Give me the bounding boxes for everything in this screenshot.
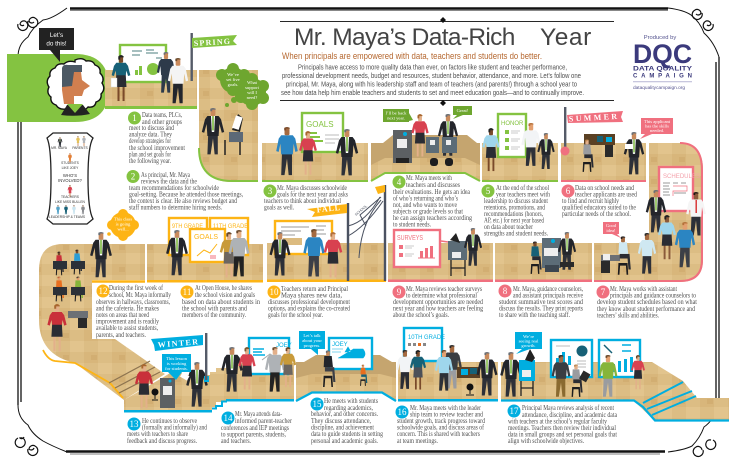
- step 17 text: attendance, discipline, and academic data: [522, 412, 617, 419]
- panel: who's involved: STUDENTS: [61, 161, 80, 165]
- step 15 text: regarding academics,: [324, 405, 373, 412]
- step 10 text: Teachers return and Principal: [281, 286, 348, 293]
- step 15 text: data to guide students in setting: [311, 431, 383, 438]
- panel: step 6 scene: [561, 132, 646, 182]
- panel: step 10 scene: [267, 221, 386, 282]
- step 5 text: year teachers meet with: [496, 192, 550, 198]
- step 16 text: student growth, track progress toward: [397, 418, 486, 425]
- step 12 text: [96, 284, 171, 339]
- step 2 text: [126, 170, 243, 212]
- step 10 text: discusses professional development: [268, 299, 350, 306]
- callout: great: Great!: [457, 108, 469, 113]
- thought bubbles: spring goals: support: [245, 85, 260, 90]
- step 12 text: and the cafeteria. He makes: [96, 306, 159, 312]
- cabinet: [160, 378, 175, 408]
- step 7 text: [596, 286, 697, 320]
- callout: let's talk: [299, 331, 325, 355]
- step 1 text: 1: [132, 113, 137, 123]
- step 15 text: They discuss attendance,: [311, 418, 371, 425]
- step 16 text: Mr. Maya meets with the leader: [410, 405, 482, 412]
- podium: [448, 233, 467, 276]
- panel: step 12 scene: [39, 232, 165, 400]
- step 15 text: behavior, and other concerns.: [311, 411, 378, 418]
- step 1 text: the following year.: [129, 158, 171, 165]
- step 6 text: teacher applicants are used: [575, 192, 638, 198]
- step 5 text: At the end of the school: [496, 185, 549, 192]
- step 14 text: Mr. Maya attends data-: [235, 411, 283, 418]
- callout: applicant: [640, 118, 673, 139]
- callout: let's talk: about your: [302, 338, 322, 343]
- callout: let's talk: Let’s talk: [303, 333, 321, 338]
- iron gate with flag poles: [348, 185, 385, 281]
- step 5 text: retentions, promotions, and: [484, 204, 545, 212]
- step 5 text: [482, 184, 550, 238]
- step 8 text: [498, 284, 584, 319]
- step 4 text: subjects or grade levels so that: [393, 208, 463, 216]
- step 5 text: strengths and student needs.: [484, 230, 548, 238]
- step 4 text: he can assign teachers according: [393, 215, 473, 222]
- step 14 text: 14: [224, 413, 233, 423]
- step 2 text: reviews the data and the: [141, 178, 197, 186]
- step 1 text: develop strategies for: [129, 138, 172, 145]
- step 4 text: of who’s returning and who’s: [393, 196, 458, 202]
- step 4 text: Mr. Maya meets with: [406, 175, 452, 182]
- iron gate with flag poles: SCHOOL: [354, 204, 368, 217]
- callout: let's do this: do this!: [46, 40, 67, 48]
- step 13 text: [127, 418, 207, 445]
- panel: step 8 scene: [495, 232, 592, 282]
- step 6 text: to find and recruit highly: [562, 198, 620, 205]
- step 4 text: their evaluations. He gets an idea: [393, 189, 470, 196]
- step 10 text: 10: [270, 287, 279, 297]
- step 6 text: particular needs of the school.: [562, 211, 631, 218]
- panel: step 17 scene: [500, 340, 729, 421]
- thought bubbles: spring goals: What: [247, 80, 258, 85]
- step 15 text: [310, 398, 383, 445]
- panel: spring step 1 scene: [105, 45, 197, 109]
- step 8 text: 8: [503, 286, 508, 296]
- callout: good idea: [603, 222, 621, 238]
- logo: Data Quality Campaign: Produced by: [644, 35, 676, 41]
- step 16 text: schoolwide goals, and discuss areas of: [397, 424, 485, 432]
- step 2 text: As principal, Mr. Maya: [141, 172, 190, 179]
- step 3 text: goals as well.: [264, 204, 294, 212]
- callout: applicant: This applicant: [644, 119, 671, 124]
- classroom desks: [426, 137, 457, 166]
- callout: let's do this: Let’s: [50, 32, 63, 39]
- podium with laptop: [225, 114, 243, 155]
- step 10 text: [268, 286, 351, 319]
- panel: who's involved: WHO’S: [63, 173, 77, 178]
- step 7 text: develop student schedules based on what: [597, 299, 697, 306]
- panel: who's involved: [47, 133, 93, 224]
- step 9 text: to determine what professional: [406, 292, 477, 300]
- panel: step 15 scene: [296, 338, 396, 401]
- grade and goals boards: 9TH GRADE: [172, 223, 204, 230]
- step 11 text: [180, 285, 261, 319]
- step 10 text: goals for the school year.: [268, 312, 323, 319]
- step 12 text: school, Mr. Maya informally: [109, 292, 171, 299]
- thought bubbles: spring goals: We’ve: [227, 72, 239, 77]
- thought bubble: class going well: This class: [114, 216, 132, 222]
- callout: real growth: growth.: [521, 343, 536, 348]
- panel: step 3 scene: [262, 113, 368, 182]
- subtitle: When principals are empowered with data, teachers and students do better.: [282, 50, 542, 61]
- step 6 text: Data on school needs and: [575, 185, 635, 192]
- step 11 text: the school with parents and: [182, 306, 248, 312]
- flag: winter: [151, 333, 207, 380]
- people: data team: [111, 52, 188, 103]
- flag: fall: [307, 185, 385, 217]
- panel: who's involved: TEACHERS: [61, 195, 80, 199]
- step 17 text: data in small groups and set personal goals that: [508, 432, 617, 438]
- intro text: see how data help him enable teachers and students to set and meet education goals—and to continually improve.: [281, 88, 584, 97]
- thought bubbles: spring goals: [216, 63, 269, 110]
- data board: spring: [120, 45, 166, 82]
- panel: step 14 scene: [221, 338, 296, 402]
- panel: step 7 scene with schedule board: [594, 143, 706, 282]
- step 2 text: goal-setting. Because he attended those meetings,: [129, 192, 243, 198]
- title: Year: [540, 24, 592, 51]
- step 17 text: Principal Maya reviews analysis of recent: [522, 405, 614, 412]
- step 15 text: discipline, and achievement: [311, 424, 374, 432]
- step 6 text: qualified educators suited to the: [562, 204, 636, 212]
- step 7 text: teachers’ skills and abilities.: [597, 312, 659, 320]
- thought bubbles: spring goals: need?: [247, 95, 257, 100]
- step 13 text: 13: [130, 419, 139, 429]
- step 16 text: at team meetings.: [397, 438, 438, 445]
- step 15 text: personal and academic goals.: [311, 438, 378, 445]
- callout: good idea: Good: [606, 223, 617, 228]
- logo: Data Quality Campaign: dataqualitycampaign.org: [633, 85, 685, 91]
- thought bubbles: spring goals: goals.: [228, 82, 238, 87]
- thought bubbles: spring goals: set five: [226, 77, 240, 82]
- panel: step 11 scene: [147, 218, 263, 282]
- desk: [584, 134, 615, 157]
- step 14 text: to support parents, students,: [221, 432, 286, 438]
- step 17 text: with teachers at the school’s regular faculty: [508, 418, 607, 426]
- step 16 text: [396, 405, 486, 445]
- step 4 text: [392, 175, 473, 228]
- intro text: principal, Mr. Maya, along with his leadership staff and team of teachers (and parents!) through a school year to: [286, 80, 577, 88]
- step 4 text: teachers and discusses: [406, 182, 460, 189]
- step 7 text: principals and guidance counselors to: [610, 292, 696, 300]
- desk and chair: [457, 367, 480, 395]
- panel: who's involved: MR. MAYA: [51, 146, 68, 150]
- callout: I'll be back: I’ll be back: [386, 110, 407, 116]
- thought bubble: class going well: is going: [116, 222, 131, 226]
- step 15 text: He meets with students: [324, 398, 378, 405]
- flag: spring: SPRING: [194, 37, 231, 48]
- step 13 text: meets with teachers to share: [127, 431, 188, 438]
- tenth grade board: 10TH GRADE: [408, 334, 446, 341]
- step 17 text: meetings. Teachers then review their individual: [508, 425, 616, 432]
- step 17 text: [508, 404, 617, 445]
- step 8 text: Mr. Maya, guidance counselors,: [513, 286, 583, 293]
- panel: who's involved: PARENTS: [72, 146, 88, 150]
- step 14 text: and teachers.: [221, 438, 251, 445]
- step 13 text: (formally and informally) and: [142, 424, 207, 432]
- flag: fall: FALL: [316, 203, 341, 214]
- step 5 text: on data about teacher: [484, 224, 534, 231]
- step 9 text: Mr. Maya reviews teacher surveys: [406, 286, 482, 293]
- panel: who's involved: LEADERSHIP & TEAMS: [49, 215, 86, 219]
- step 4 text: to student needs.: [393, 222, 431, 228]
- step 10 text: Maya shares new data,: [281, 292, 342, 300]
- step 11 text: based on data about students in: [182, 299, 261, 306]
- panel: step 5 scene: [482, 114, 558, 182]
- step 15 text: 15: [312, 399, 322, 409]
- panel: green intro band with Mr. Maya: [7, 28, 109, 122]
- step 13 text: He continues to observe: [142, 418, 197, 425]
- callout: lesson working: [162, 354, 191, 380]
- step 9 text: development opportunities are needed: [393, 299, 484, 306]
- logo: Data Quality Campaign: DATA QUALITY: [633, 66, 693, 72]
- intro text: [281, 62, 584, 97]
- data boards: [551, 340, 640, 377]
- flag: winter: WINTER: [157, 337, 199, 349]
- callout: applicant: has the skills: [645, 124, 669, 128]
- step 9 text: about the school’s goals.: [393, 312, 449, 319]
- step 2 text: staff numbers to determine hiring needs.: [129, 204, 222, 212]
- surveys board: SURVEYS: [397, 235, 423, 242]
- desk: [601, 254, 620, 273]
- logo: Data Quality Campaign: DQC: [633, 39, 692, 69]
- callout: lesson working: is working: [167, 361, 187, 366]
- grade and goals boards: [169, 218, 249, 262]
- step 1 text: meet to discuss and: [129, 125, 175, 132]
- meeting table: [542, 238, 561, 272]
- logo: Data Quality Campaign: [633, 35, 693, 91]
- step 3 text: teachers to think about individual: [264, 198, 341, 205]
- step 12 text: 12: [98, 286, 108, 296]
- step 1 text: analyze data. They: [129, 132, 173, 138]
- callout: great: [453, 106, 472, 119]
- step 17 text: align with schoolwide objectives.: [508, 438, 584, 445]
- flag: summer: SUMMER: [569, 112, 618, 123]
- callout: let's talk: progress.: [304, 343, 320, 348]
- callout: lesson working: for students.: [165, 366, 188, 371]
- step 1 text: plan and set goals for: [129, 152, 172, 158]
- thought bubble: class going well: [107, 209, 139, 241]
- callout: let's do this: [39, 28, 74, 62]
- step 16 text: 16: [398, 407, 407, 417]
- filing cabinet: [393, 130, 412, 163]
- callout: good idea: idea!: [606, 228, 616, 233]
- step 12 text: parents, and teachers.: [96, 332, 146, 339]
- callout: applicant: needed.: [650, 128, 664, 133]
- step 4 text: not, and who wants to move: [393, 202, 457, 209]
- step 10 text: options, and explains the co-created: [268, 306, 351, 312]
- step 4 text: 4: [397, 177, 402, 187]
- step 6 text: [562, 184, 638, 218]
- step 16 text: concern. This is shared with teachers: [397, 431, 480, 438]
- step 1 text: Data teams, PLCs,: [142, 112, 182, 119]
- icon: Mr. Maya portrait medallion: [47, 59, 104, 116]
- callout: real growth: seeing real: [519, 338, 539, 344]
- stool: [152, 388, 158, 400]
- callout: real growth: We’re: [523, 334, 534, 339]
- step 11 text: 11: [183, 287, 191, 297]
- step 2 text: 2: [131, 172, 135, 182]
- goals board: GOALS: [306, 120, 334, 129]
- step 7 text: they know about student performance and: [597, 306, 696, 313]
- step 1 text: [128, 112, 185, 165]
- flag: summer: [560, 107, 623, 156]
- panel: who's involved: LIKE MISS BULLEN: [55, 200, 86, 204]
- podium: [519, 349, 535, 396]
- logo: Data Quality Campaign: CAMPAIGN: [633, 74, 692, 80]
- panel: step 2 scene: [199, 70, 258, 182]
- step 9 text: next year and how teachers are feeling: [393, 306, 484, 312]
- step 5 text: recommendations (honors,: [484, 211, 543, 218]
- step 7 text: 7: [601, 287, 606, 297]
- step 14 text: informed parent-teacher: [235, 418, 293, 425]
- panel: step 4 scene: [371, 114, 480, 181]
- step 3 text: Mr. Maya discusses schoolwide: [277, 185, 347, 192]
- step 3 text: 3: [268, 186, 273, 196]
- step 14 text: [221, 411, 293, 445]
- panel: who's involved: INVOLVED?: [58, 178, 83, 183]
- grade and goals boards: GOALS: [194, 232, 218, 241]
- step 16 text: ship team to review teacher and: [410, 412, 484, 418]
- step 11 text: members of the community.: [182, 312, 246, 319]
- step 8 text: student summative test scores and: [499, 299, 584, 306]
- step 12 text: available to assist students,: [96, 325, 158, 332]
- step 8 text: discuss the results. They print reports: [499, 306, 583, 312]
- header rules: [280, 17, 614, 106]
- step 6 text: 6: [566, 186, 571, 196]
- step 12 text: improvement and is readily: [96, 318, 160, 326]
- students at desks: [53, 250, 85, 301]
- step 12 text: During the first week of: [109, 285, 164, 292]
- step 14 text: conferences and IEP meetings: [221, 425, 289, 432]
- callout: I'll be back: next year.: [387, 116, 405, 120]
- step 5 text: leadership to discuss student: [484, 198, 548, 205]
- panel: step 13 scene: [124, 362, 227, 412]
- step 3 text: [264, 184, 348, 212]
- step 5 text: AP, etc.) for next year based: [484, 218, 544, 224]
- step 7 text: Mr. Maya works with assistant: [610, 286, 677, 293]
- flag: spring: [190, 33, 237, 81]
- step 8 text: to share with the teaching staff.: [499, 312, 570, 319]
- step 11 text: At Open House, he shares: [195, 285, 252, 292]
- schedules board: SCHEDULES: [663, 173, 701, 180]
- step 2 text: team recommendations for schoolwide: [129, 185, 219, 192]
- step 12 text: observes in hallways, classrooms,: [96, 299, 170, 306]
- panel: step 16 scene: [396, 328, 498, 402]
- step 1 text: and other groups: [142, 119, 182, 126]
- intro text: professional development needs, budget and resources, student behavior, attendance, and more. Let’s follow one: [282, 71, 581, 80]
- step 5 text: 5: [486, 186, 491, 196]
- joey board: JOEY: [332, 342, 348, 348]
- step 12 text: notes on areas that need: [96, 312, 149, 319]
- panel: who's involved: LIKE JOEY: [62, 166, 79, 170]
- fall board: [275, 221, 332, 254]
- thought bubble: class going well: well...: [117, 226, 129, 232]
- panel: step 9 scene: [388, 228, 493, 282]
- step 9 text: [392, 286, 484, 319]
- callout: I'll be back: [383, 109, 413, 122]
- honor board: HONOR: [501, 121, 524, 127]
- step 8 text: and assistant principals receive: [513, 292, 583, 300]
- step 11 text: the school vision and goals: [195, 292, 255, 299]
- callout: lesson working: This lesson: [166, 356, 188, 361]
- step 9 text: 9: [397, 287, 402, 297]
- step 1 text: the school improvement: [129, 145, 185, 152]
- step 3 text: goals for the next year and asks: [277, 192, 348, 198]
- step 2 text: the context is clear. He also reviews budget and: [129, 198, 237, 205]
- teacher desk: [68, 311, 88, 328]
- title: Mr. Maya’s Data-Rich: [294, 24, 516, 51]
- step 17 text: 17: [510, 406, 519, 416]
- intro text: Principals have access to more quality data than ever, on factors like student and teacher performance,: [298, 62, 567, 72]
- callout: real growth: [515, 332, 542, 354]
- step 13 text: feedback and discuss progress.: [127, 438, 197, 445]
- joey board: JOEY: [276, 343, 292, 349]
- grade and goals boards: 11TH GRADE: [213, 223, 249, 230]
- thought bubbles: spring goals: will I: [247, 90, 257, 95]
